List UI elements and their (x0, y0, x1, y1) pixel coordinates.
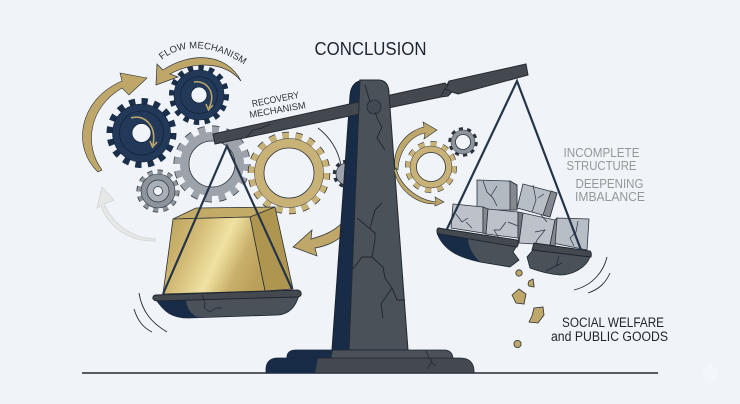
label: incomplete structure (564, 145, 640, 173)
watermark sparkle (701, 363, 719, 384)
gear: large gold (252, 128, 341, 210)
gear: partial gray behind pillar (335, 162, 359, 186)
left pan crack (202, 295, 222, 312)
base tier upper navy (287, 350, 333, 359)
gear: navy left (110, 102, 172, 164)
gear: gray small (450, 129, 476, 155)
left pan bowl shadow (155, 298, 200, 318)
motion lines right (574, 257, 610, 293)
label: deepening imbalance: IMBALANCE (575, 189, 645, 204)
arrow: large gold cycle arrow (83, 73, 147, 172)
label: social welfare and public goods: SOCIAL WELFARE (562, 315, 664, 330)
right pan rim left (437, 228, 518, 247)
arrow: faded recovery arrow (97, 187, 155, 241)
left pan strings (163, 146, 292, 294)
pillar pivot (367, 100, 381, 114)
arrow: gold ring upper (395, 122, 437, 170)
pillar navy side (332, 80, 372, 350)
left pan rim (153, 290, 301, 301)
pillar cracks (353, 85, 405, 318)
arrow: gold arrow to weight (293, 223, 343, 256)
label: social welfare and public goods (551, 315, 668, 344)
gear: large gray (178, 130, 246, 198)
title: CONCLUSION (314, 39, 426, 59)
gear cluster: flow and recovery mechanisms (82, 42, 345, 242)
base crack (426, 351, 436, 369)
label: flow mechanism: FLOW MECHANISM (158, 42, 247, 64)
pillar front face (349, 80, 408, 350)
arrow: inner gold rotation (131, 117, 157, 147)
right pan bowl left half (437, 233, 519, 267)
right pan with cracked blocks (437, 81, 610, 348)
gear: small gray (140, 172, 176, 210)
right pan strings (447, 81, 581, 250)
gear: gold small (408, 144, 454, 190)
arrow: flow arrow over gears (156, 58, 241, 85)
label: deepening imbalance: DEEPENING (576, 176, 644, 191)
arrow: gold ring lower (394, 168, 444, 206)
falling debris (512, 270, 544, 348)
gear: navy top (172, 68, 226, 122)
small gears right of pillar (394, 122, 476, 206)
beam crack (247, 84, 452, 137)
base tier upper (287, 350, 453, 362)
label: social welfare and public goods: and PUBLIC GOODS (551, 329, 668, 344)
right pan crack (546, 256, 562, 271)
left pan bowl (155, 295, 299, 318)
scale pillar (213, 64, 528, 373)
label: recovery mechanism (249, 90, 307, 121)
label: incomplete structure: STRUCTURE (566, 158, 637, 173)
right pan bowl shadow (437, 233, 480, 262)
arrow: inner gold rotation top (194, 82, 213, 110)
right pan rim right (532, 243, 591, 257)
label: deepening imbalance (575, 176, 645, 204)
scale beam (213, 64, 528, 144)
base tier lower (266, 358, 474, 373)
base tier lower navy (266, 358, 318, 373)
motion lines left (134, 293, 167, 332)
left pan with gold weight (134, 146, 301, 332)
gold weight (163, 207, 293, 294)
right pan bowl right half (527, 250, 590, 275)
cracked blocks (451, 180, 589, 250)
ground line (82, 372, 658, 374)
label: recovery mechanism: MECHANISM (249, 100, 307, 121)
label: incomplete structure: INCOMPLETE (564, 145, 640, 160)
label: recovery mechanism: RECOVERY (251, 90, 301, 110)
